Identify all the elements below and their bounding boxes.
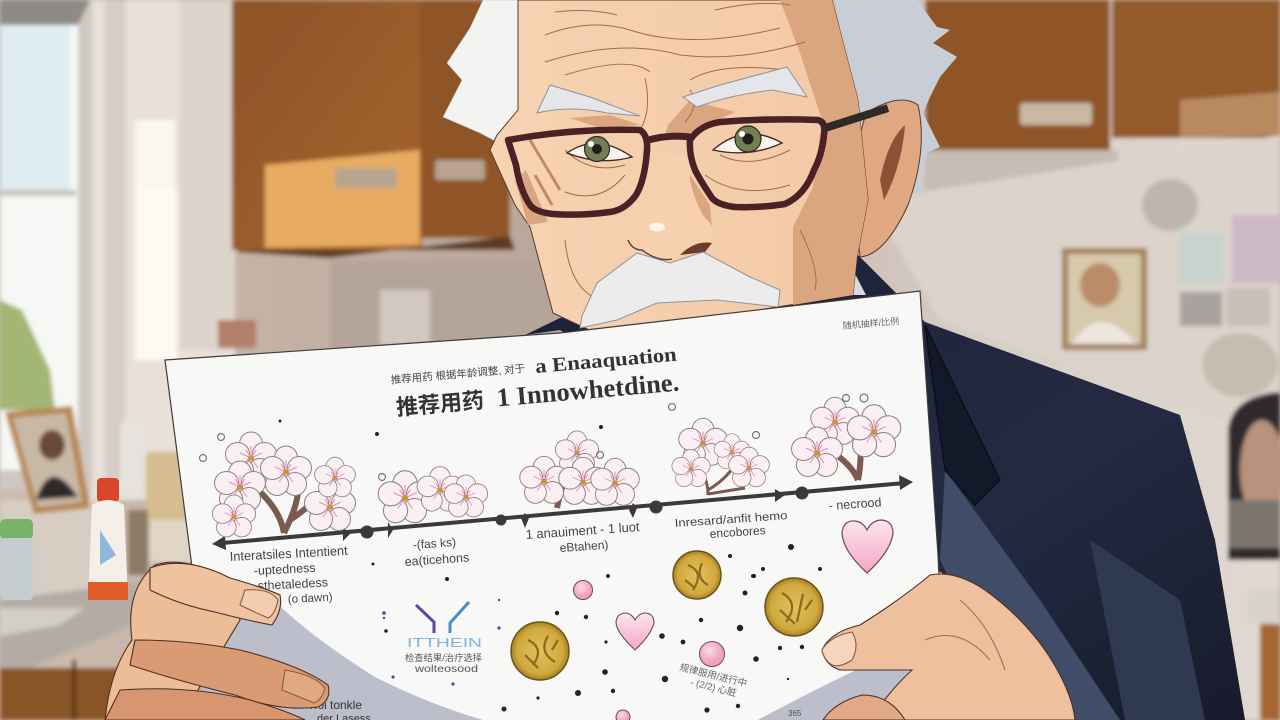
coins bbox=[511, 551, 823, 680]
stage labels: ea(ticehons bbox=[404, 551, 470, 569]
small caption near ball: 规律服用/进行中 bbox=[678, 661, 748, 690]
jacket highlight folds bbox=[852, 270, 1205, 720]
stage labels: (o dawn) bbox=[288, 592, 333, 606]
face shading right bbox=[780, 0, 868, 305]
small caption near ball: - (2/2) 心脏 bbox=[689, 676, 738, 699]
pink balls bbox=[574, 580, 724, 720]
title: a Enaaquation bbox=[534, 344, 678, 378]
big heart bbox=[842, 520, 893, 573]
man: nose bbox=[627, 155, 713, 260]
man: hair left bbox=[443, 0, 530, 142]
stage labels: - necrood bbox=[828, 495, 882, 513]
man: face bbox=[490, 0, 868, 335]
stage labels: eBtahen) bbox=[559, 538, 609, 555]
sheet curled shadow band left bbox=[205, 588, 490, 720]
footer caption on curl: rfoi tonkle bbox=[310, 698, 362, 712]
title: 1 Innowhetdine. bbox=[495, 368, 680, 412]
antibody caption: 检查结果/治疗选择 bbox=[405, 652, 482, 663]
stage labels: Inresard/anfit hemo bbox=[674, 510, 788, 530]
left hand: thumb bbox=[150, 563, 281, 625]
stage labels: -uptedness bbox=[253, 561, 316, 578]
sheet curled shadow band right bbox=[754, 632, 945, 720]
footer caption on curl bbox=[310, 698, 371, 720]
scattered dots bbox=[278, 420, 822, 713]
tree stage 3 bbox=[520, 431, 639, 508]
right hand bbox=[822, 574, 1075, 720]
tree stage 5 bbox=[792, 397, 901, 480]
tree stage 1 bbox=[212, 432, 356, 537]
corner note: 随机抽样/比例 bbox=[842, 315, 899, 331]
small bubbles bbox=[200, 394, 868, 480]
stage labels bbox=[229, 495, 882, 606]
tree stage 4 bbox=[672, 418, 769, 495]
blue dots near antibody bbox=[382, 599, 501, 686]
man: hair right bbox=[835, 0, 957, 197]
man: jacket bbox=[525, 255, 1245, 720]
antibody caption: ITTHEIN bbox=[407, 635, 482, 650]
stage labels: Interatsiles Intentient bbox=[229, 543, 348, 564]
antibody caption: wolteosood bbox=[414, 664, 478, 675]
left hand bbox=[105, 562, 329, 720]
object: jar with green lid bbox=[0, 519, 33, 600]
stage labels: encobores bbox=[709, 523, 766, 541]
stamp text bottom: 365 bbox=[788, 709, 802, 718]
left hand: index finger bbox=[130, 640, 329, 708]
antibody icon bbox=[416, 602, 469, 633]
antibody caption bbox=[405, 635, 482, 675]
infographic sheet bbox=[165, 291, 945, 720]
man: eyebrows bbox=[537, 67, 807, 116]
title bbox=[390, 344, 680, 421]
small heart bbox=[616, 613, 654, 650]
man: left eye bbox=[567, 136, 632, 162]
tree stage 2 bbox=[378, 467, 488, 523]
man: right ear bbox=[850, 100, 921, 257]
man: glasses bbox=[508, 108, 888, 215]
stage labels: -(fas ks) bbox=[412, 535, 456, 552]
title: 推荐用药 根据年龄调整, 对于 bbox=[390, 362, 526, 387]
title: 推荐用药 bbox=[395, 388, 485, 420]
forehead wrinkles bbox=[530, 3, 816, 300]
stage labels: 1 anauiment - 1 luot bbox=[525, 519, 640, 542]
right hand: palm and thumb bbox=[822, 574, 1075, 720]
timeline arrow bbox=[212, 475, 913, 550]
object: bottle with red cap bbox=[88, 478, 128, 600]
face shading brow and nose bbox=[515, 100, 735, 252]
right hand: lower finger bbox=[823, 695, 905, 720]
left hand: palm bbox=[105, 562, 240, 720]
man: mustache bbox=[580, 252, 780, 328]
sheet base bbox=[165, 291, 942, 720]
man: right eye bbox=[713, 126, 782, 153]
stage labels: sthetaledess bbox=[257, 575, 328, 593]
left hand: middle finger bbox=[105, 689, 305, 720]
